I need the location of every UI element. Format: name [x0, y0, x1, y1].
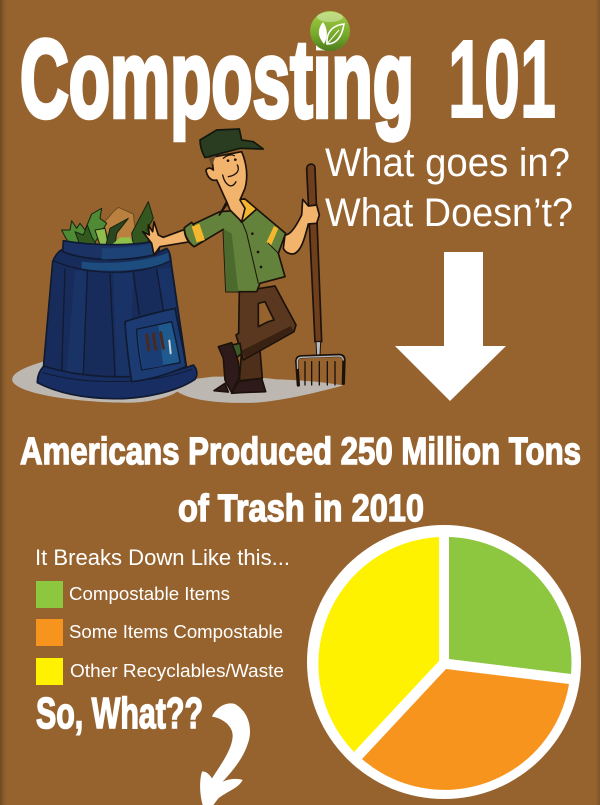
arrow: curved — [200, 703, 250, 805]
ground shadow — [12, 362, 343, 403]
man: hand on bin and arm — [143, 222, 190, 255]
legend — [35, 545, 290, 685]
man: shirt — [184, 209, 286, 292]
slice: green — [449, 537, 571, 674]
so what: So, What?? — [36, 689, 203, 738]
pie chart — [307, 525, 581, 799]
legend heading: It Breaks Down Like this... — [35, 545, 290, 570]
man: trousers and shoes — [214, 286, 296, 393]
heading: what goes in: What goes in? — [325, 141, 570, 185]
bin — [37, 241, 197, 399]
legend: other — [36, 658, 284, 685]
slice: yellow — [318, 537, 439, 752]
man: collar, neck and head — [206, 152, 257, 222]
man: cap — [200, 129, 263, 158]
icon: leaf badge — [310, 11, 350, 51]
legend: some compostable: Some Items Compostable — [69, 622, 283, 642]
man: right arm and hand — [283, 199, 319, 254]
arrow: down — [395, 252, 506, 401]
legend: other: Other Recyclables/Waste — [70, 661, 284, 681]
pitchfork — [297, 164, 344, 385]
heading: what goes in: What Doesn’t? — [325, 191, 573, 235]
illustration: man with compost bin — [12, 129, 344, 403]
legend: compostable: Compostable Items — [69, 584, 230, 604]
compost contents — [62, 202, 153, 245]
heading: what goes in — [325, 141, 573, 235]
headline — [20, 431, 581, 530]
legend: some compostable — [36, 619, 283, 646]
legend: compostable — [36, 581, 230, 608]
slice: orange — [362, 669, 569, 790]
headline: of Trash in 2010 — [178, 488, 424, 530]
